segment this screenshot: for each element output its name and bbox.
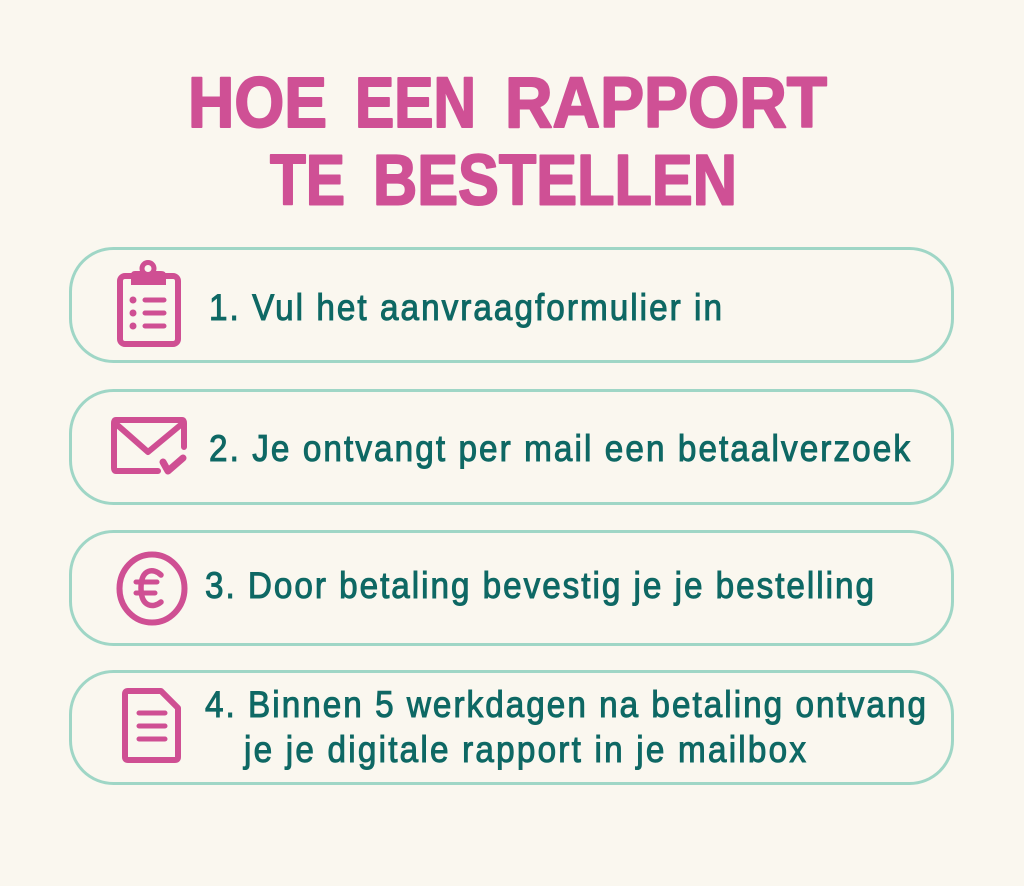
icon: envelope with check (114, 420, 184, 471)
step 2 text: 2. Je ontvangt per mail een betaalverzoek (209, 428, 910, 469)
step 4 text: je je digitale rapport in je mailbox (243, 729, 806, 770)
icon: clipboard (120, 260, 178, 344)
step 4 text (205, 684, 926, 770)
panel: step 4 (70, 672, 952, 784)
title: BESTELLEN (373, 142, 737, 220)
icon: document (125, 691, 178, 760)
title: RAPPORT (505, 64, 827, 143)
title: TE (270, 142, 345, 220)
step 4 text: 4. Binnen 5 werkdagen na betaling ontvang (205, 684, 926, 725)
icon: euro coin (120, 554, 184, 622)
panel: step 3 (70, 532, 952, 644)
step 1 text: 1. Vul het aanvraagformulier in (209, 287, 722, 328)
panel: step 1 (70, 248, 952, 362)
panel: step 2 (70, 390, 952, 504)
title: HOE (188, 64, 327, 143)
title (188, 64, 827, 220)
title: EEN (355, 64, 476, 143)
step 3 text: 3. Door betaling bevestig je je bestelling (205, 565, 874, 606)
